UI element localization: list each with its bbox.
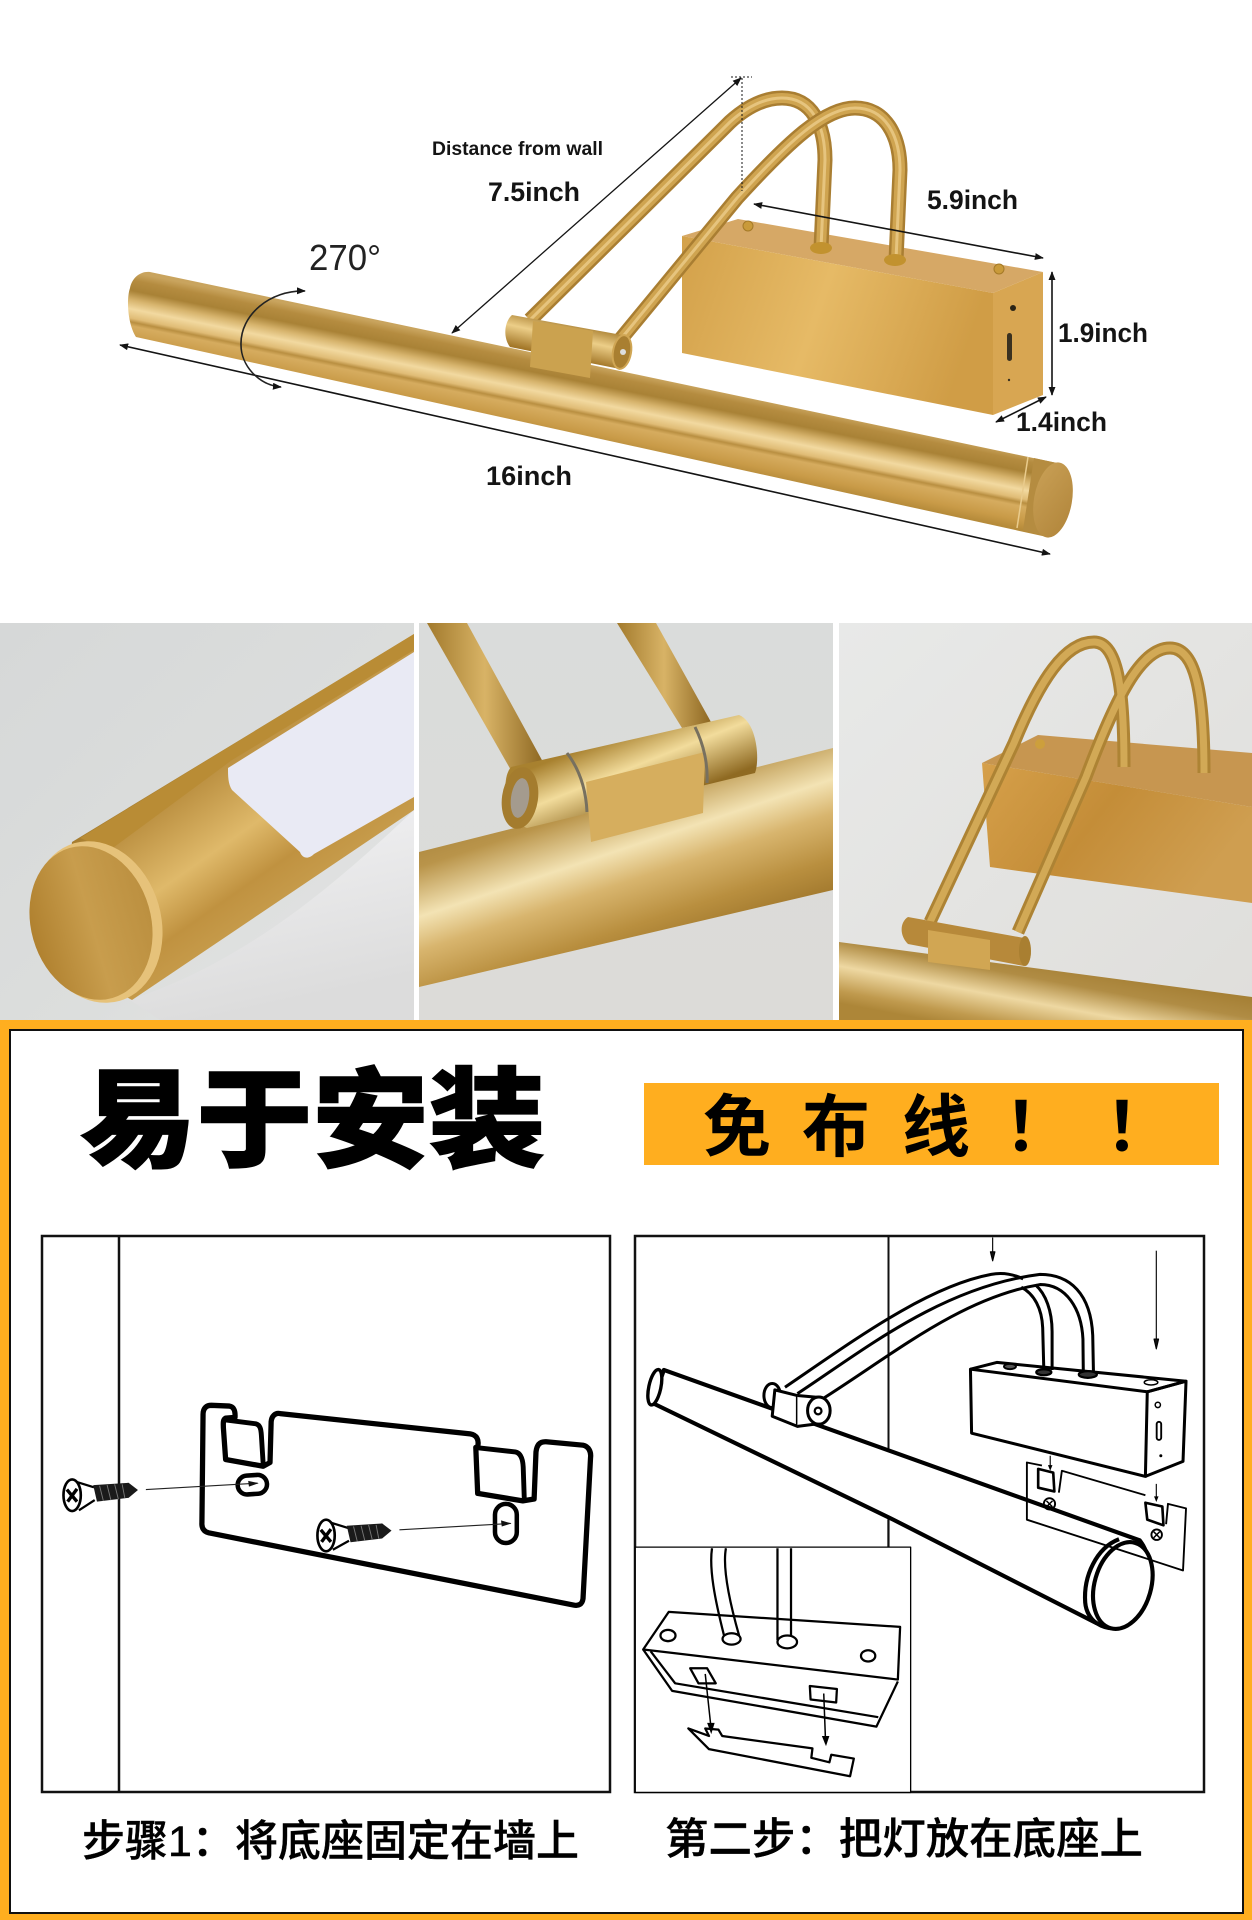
arrow: wall distance bbox=[452, 77, 752, 333]
gold tube body bbox=[60, 634, 414, 1000]
curved lamp arms bbox=[530, 98, 906, 340]
panel: product dimensions bbox=[120, 77, 1148, 554]
caption: step 2: 第二步：把灯放在底座上 bbox=[665, 1816, 1143, 1864]
mounting bracket bbox=[1027, 1456, 1186, 1570]
hinge bracket plate bbox=[586, 752, 705, 842]
lamp box bbox=[682, 219, 1043, 415]
arrow: 16 inch bbox=[120, 345, 1050, 554]
mounting bracket bbox=[202, 1405, 591, 1605]
badge: no wiring: 免布线！！ bbox=[703, 1090, 1173, 1166]
white diffuser window bbox=[228, 652, 414, 858]
hinge clamp bbox=[902, 917, 1031, 970]
arm left bbox=[427, 623, 543, 772]
screw 1 bbox=[63, 1479, 138, 1511]
panel: installation sheet bbox=[10, 1030, 1243, 1913]
lamp box bbox=[982, 735, 1252, 903]
panel: step 2 diagram bbox=[635, 1236, 1204, 1792]
panel: step 1 diagram bbox=[42, 1236, 610, 1792]
label: distance from wall: Distance from wall bbox=[432, 139, 603, 160]
end cap bbox=[46, 841, 162, 1003]
curved arms bbox=[930, 642, 1204, 932]
arrow: 270 degree rotation bbox=[241, 291, 305, 387]
curved arms bbox=[785, 1274, 1093, 1399]
tube light bar bbox=[839, 942, 1252, 1020]
caption: step 1: 步骤1：将底座固定在墙上 bbox=[82, 1818, 579, 1866]
label: 16 inch: 16inch bbox=[486, 461, 572, 491]
orange frame bbox=[0, 1020, 1252, 1920]
lamp box bbox=[970, 1362, 1186, 1476]
hinge clamp bbox=[505, 315, 634, 378]
arrow: 5.9 inch bbox=[754, 204, 1043, 258]
arrow: 1.4 inch bbox=[996, 397, 1046, 422]
inset: underside view bbox=[635, 1547, 911, 1792]
arrow: 1.9 inch bbox=[1051, 272, 1053, 395]
label: 1.9 inch: 1.9inch bbox=[1058, 318, 1148, 348]
arrow to slot 1 bbox=[146, 1483, 258, 1490]
label: 7.5 inch: 7.5inch bbox=[488, 177, 580, 207]
panel: photo of tube end bbox=[0, 623, 414, 1020]
arrows down bbox=[990, 1238, 1159, 1349]
gold tube body bbox=[419, 748, 833, 987]
panel: photo of arm and box bbox=[839, 623, 1252, 1020]
screw 2 bbox=[317, 1520, 392, 1551]
hinge cylinder bbox=[505, 715, 757, 828]
arm right bbox=[617, 623, 711, 728]
arrow to slot 2 bbox=[399, 1523, 511, 1530]
title: 易于安装 bbox=[80, 1060, 545, 1181]
label: 5.9 inch: 5.9inch bbox=[927, 185, 1018, 215]
label: 270 degrees: 270° bbox=[309, 237, 381, 278]
hinge clamp bbox=[764, 1383, 830, 1426]
label: 1.4 inch: 1.4inch bbox=[1016, 407, 1107, 437]
tube light bar bbox=[645, 1368, 1162, 1636]
panel: photo of hinge bbox=[419, 623, 833, 1020]
tube light bar bbox=[128, 272, 1078, 541]
